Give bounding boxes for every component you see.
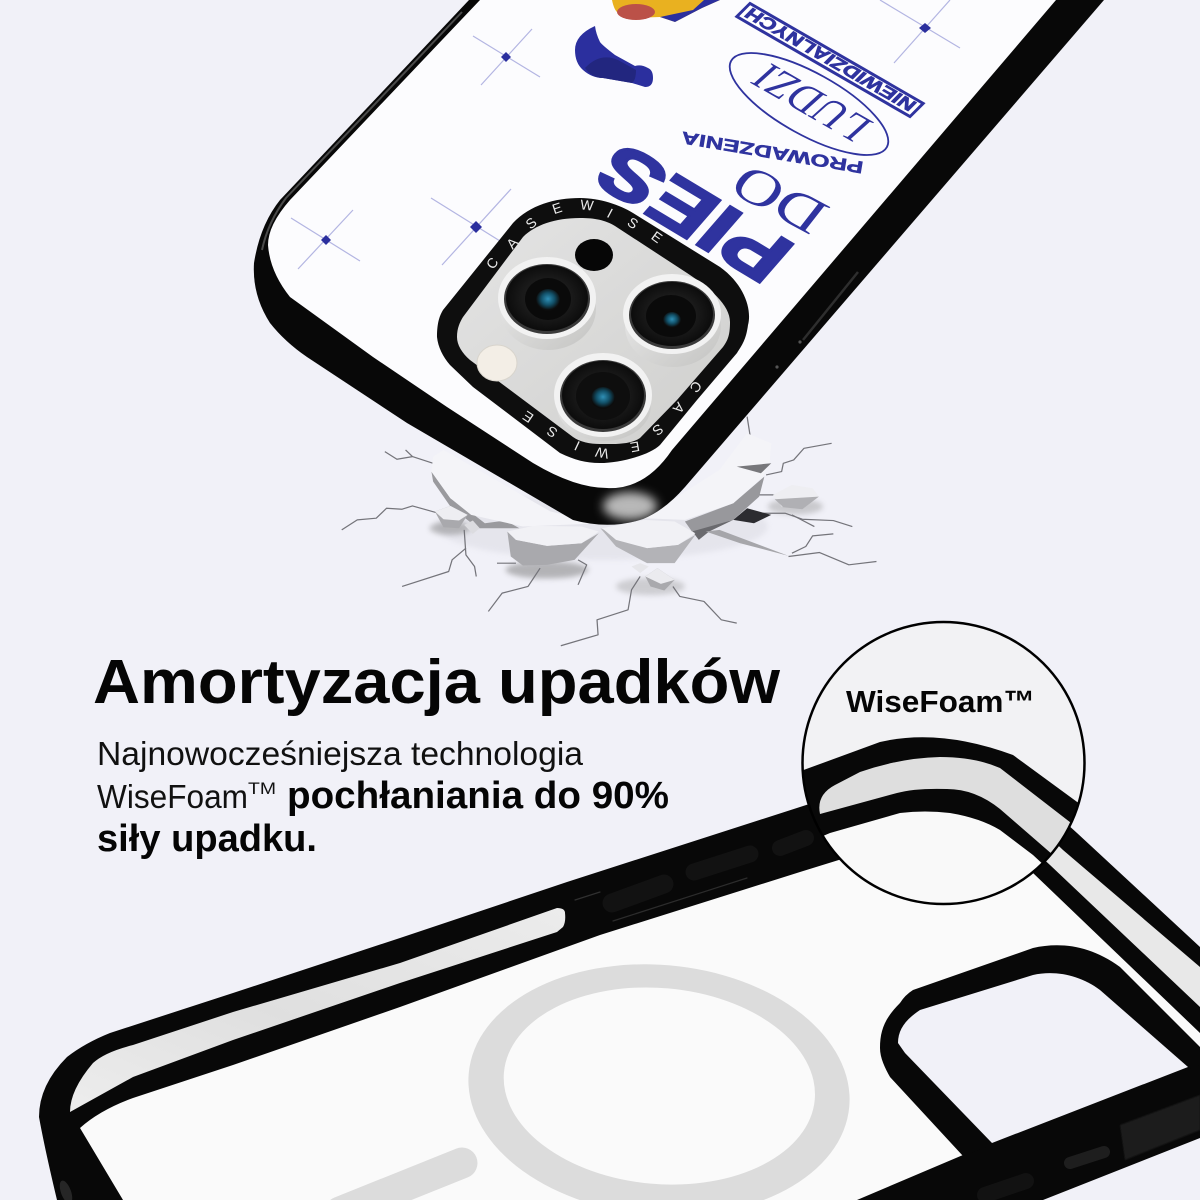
label: NIEWIDZIALNYCH: NIEWIDZIALNYCH [740, 4, 921, 115]
ring text: CASEWISE bottom: I [572, 438, 582, 454]
camera cutout opening [898, 973, 1188, 1143]
illustration blob: yellow head [612, 0, 720, 22]
ring text: CASEWISE top [483, 196, 665, 272]
oval badge: LUDZI [716, 34, 902, 174]
body text: siły upadku. [97, 818, 317, 860]
ring text: CASEWISE top: I [605, 205, 615, 221]
body text: Najnowocześniejsza technologia [97, 736, 583, 773]
ring text: CASEWISE top: S [625, 214, 641, 232]
design text: DO: DO [720, 154, 839, 245]
ring text: CASEWISE bottom: E [520, 408, 536, 426]
magnetic ring [458, 949, 860, 1200]
label: NIEWIDZIALNYCH [737, 2, 924, 117]
ring text: CASEWISE top: E [649, 228, 665, 246]
camera sensor [575, 239, 613, 271]
left foam strip [70, 908, 565, 1112]
WiseFoam magnifier callout [790, 620, 1095, 910]
magnet alignment pill [340, 1163, 462, 1200]
ring text: CASEWISE bottom: S [544, 423, 560, 441]
ring text: CASEWISE top: S [522, 214, 540, 232]
bottom case (inside view) [39, 748, 1200, 1200]
body text: pochłaniania do 90% [287, 775, 669, 817]
ring text: CASEWISE top: A [503, 234, 522, 252]
band sheen [1120, 1095, 1200, 1160]
camera ring [437, 196, 749, 463]
ring text: CASEWISE bottom: C [687, 378, 705, 396]
oval badge: LUDZI: LUDZI [742, 56, 883, 148]
side buttons [575, 838, 1026, 1195]
ring text: CASEWISE bottom [520, 378, 705, 462]
lens right [623, 274, 721, 367]
lens left [498, 257, 596, 350]
ring text: CASEWISE top: E [550, 199, 564, 217]
bumper highlight [262, 12, 858, 520]
design text: PROWADZENIA: PROWADZENIA [680, 128, 865, 177]
ring text: CASEWISE bottom: S [649, 421, 667, 439]
port cutout [1070, 1152, 1104, 1163]
case bumper [254, 0, 1104, 525]
body text: WiseFoam [97, 778, 248, 815]
camera flash [477, 345, 517, 381]
ring text: CASEWISE bottom: E [629, 438, 641, 456]
body text: TM [248, 779, 276, 798]
case frame [39, 748, 1200, 1200]
heading: Amortyzacja upadków [93, 648, 781, 717]
body text [97, 736, 669, 860]
star decorations [291, 0, 960, 269]
illustration blob: blue shape [575, 26, 653, 87]
lower left button [57, 1179, 75, 1200]
top phone with case [254, 0, 1104, 525]
clear back panel [80, 810, 1200, 1200]
lens bottom [554, 353, 652, 441]
camera cutout frame [880, 945, 1200, 1156]
callout label: WiseFoam™ [846, 684, 1035, 719]
ring text: CASEWISE top: C [483, 254, 501, 272]
ring text: CASEWISE bottom: W [593, 444, 610, 462]
ring text: CASEWISE bottom: A [669, 399, 688, 417]
case back panel [268, 0, 1056, 488]
design text: PIES: PIES [578, 129, 809, 298]
cracked ground [342, 417, 876, 646]
right foam strip [990, 790, 1200, 1007]
ring text: CASEWISE top: W [580, 196, 595, 214]
